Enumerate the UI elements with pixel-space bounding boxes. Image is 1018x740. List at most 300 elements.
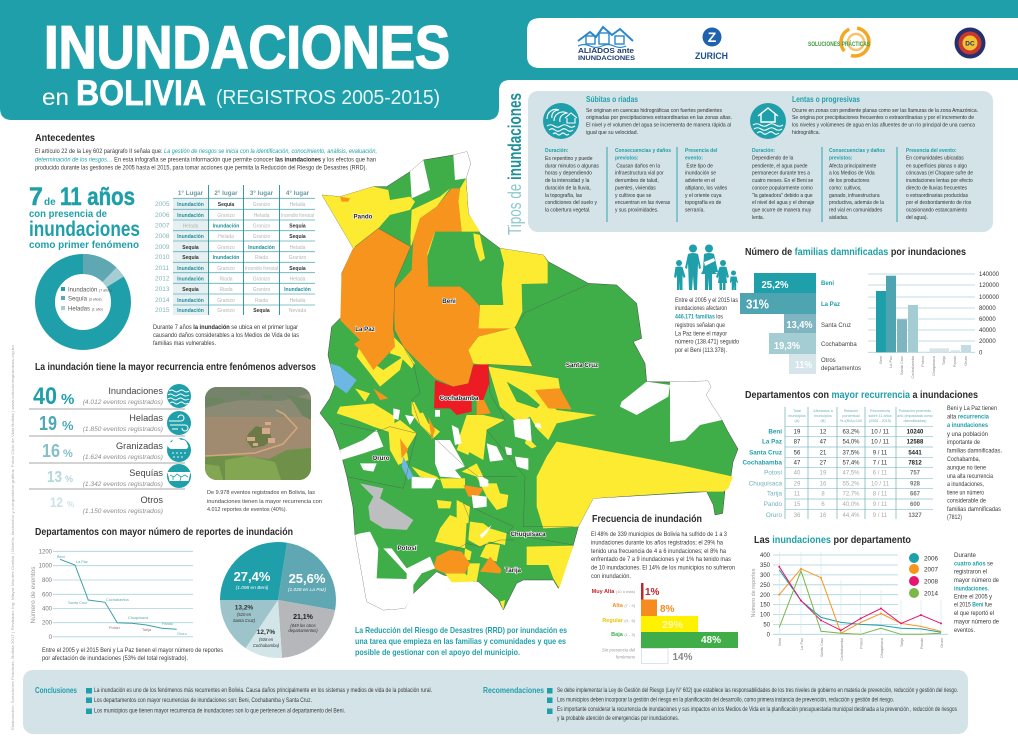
table: ranking por año: Sequía: [218, 202, 234, 208]
text: recurrencia: Beni y La Paz tienen: [947, 406, 997, 412]
line chart: reportes por departamento: 1200: [39, 549, 53, 555]
line chart: inundaciones por departamento: Tarija: [900, 637, 904, 647]
line chart: inundaciones por departamento: Número de reportes: [751, 568, 757, 617]
text: frecuencia: El 48% de 339 municipios de Bolivia ha sufrido de 1 a 3: [591, 532, 728, 538]
table: recurrencia por departamento: año (impactada como: [897, 414, 933, 418]
title: BOLIVIA: [76, 74, 206, 113]
line chart: reportes por departamento: 800: [42, 578, 53, 584]
bar chart: familias por departamento: 40000: [979, 328, 996, 334]
bar chart: frecuencia: 8%: [660, 604, 675, 615]
title: [42, 14, 450, 113]
line chart: inundaciones por departamento: 350: [760, 563, 771, 569]
line chart: reportes por departamento: [30, 549, 193, 641]
text: lentas consecuencias: a los Medios de Vida: [829, 170, 875, 177]
panel: antecedentes: determinación de los riesgos… En esta infografía se presenta información que permite conocer las inundaciones y los efectos que han: [35, 158, 376, 164]
recomendaciones: y la probable atención de emergencias por inundaciones.: [557, 716, 679, 722]
text: súbitas duración: la topografía, las: [545, 193, 582, 199]
table: recurrencia por departamento: 16: [820, 482, 827, 488]
chart legend: 2008: [924, 578, 939, 586]
text: súbitas duración: [545, 148, 599, 214]
list: fenómenos adversos: %: [65, 474, 73, 484]
chart legend: 2014: [924, 590, 939, 598]
text: lentas presencia: por el desbordamiento de ríos: [906, 200, 972, 206]
text: súbitas presencia: altiplano, los valles: [685, 185, 728, 192]
text: reportes: [42, 648, 223, 662]
table: ranking por año: Inundación: [177, 213, 204, 219]
list: fenómenos adversos: Granizadas: [116, 441, 163, 451]
table: ranking por año: Granizo: [217, 298, 235, 304]
text: lentas presencia: directo de lluvias frecuentes: [906, 185, 967, 192]
list: fenómenos adversos: %: [62, 418, 74, 433]
callout: RRD: La Reducción del Riesgo de Desastres (RRD) por inundación es: [355, 625, 567, 635]
map: orange municipalities: [340, 188, 572, 573]
text: lentas consecuencias: [829, 148, 885, 221]
text: lentas consecuencias: de los productores: [829, 178, 870, 184]
heading: 7 de 11 años: de: [44, 197, 56, 208]
list: fenómenos adversos: 40: [33, 383, 57, 410]
list: fenómenos adversos: (1.342 eventos registrados): [83, 481, 163, 488]
table: ranking por año: Inundación: [177, 298, 204, 304]
table: recurrencia por departamento: 72,7%: [842, 492, 860, 498]
table: recurrencia por departamento: municipios: [788, 414, 806, 418]
panel: tipos de inundaciones: [528, 91, 993, 232]
table: recurrencia por departamento: 757: [910, 471, 921, 477]
line chart: reportes por departamento: Cochabamba: [106, 598, 129, 602]
text: súbitas presencia: Presencia del: [685, 148, 718, 154]
table: recurrencia por departamento: 12: [820, 430, 827, 436]
table: recurrencia por departamento: 21: [820, 450, 827, 456]
table: ranking por año: 2° lugar: [214, 189, 238, 197]
table: recurrencia por departamento: (B): [821, 419, 825, 423]
text: frecuencia: inundaciones durante los años registrados; el 29% ha: [591, 540, 724, 546]
bar chart: familias por departamento: Oruro: [964, 356, 968, 366]
table: recurrencia por departamento: Santa Cruz: [749, 449, 782, 456]
text: frecuencia: [591, 513, 735, 580]
bar chart: familias por departamento: 60000: [979, 317, 996, 323]
text: recurrencia: importante de: [947, 440, 981, 446]
text: frecuencia: con inundación.: [591, 574, 631, 580]
table: recurrencia por departamento: Oruro: [766, 512, 782, 519]
pie chart: Cochabamba): [253, 643, 280, 648]
table: ranking por año: Sequía: [253, 308, 270, 314]
icon: hail cloud: [167, 438, 191, 462]
logo: Aliados ante Inundaciones: INUNDACIONES: [578, 55, 636, 62]
list: fenómenos adversos: 12: [50, 494, 63, 510]
bar chart: familias por departamento: 0: [979, 350, 983, 356]
donut chart: Heladas (1 año): [68, 306, 103, 312]
funnel chart: porcentaje de familias: Cochabamba: [821, 342, 857, 348]
table: ranking por año: Granizo: [217, 308, 235, 314]
list: fenómenos adversos: Heladas: [129, 413, 163, 423]
bar chart: familias por departamento: Potosí: [921, 355, 925, 367]
text: recurrencia: [947, 406, 1002, 521]
heading: mayor recurrencia: La inundación tiene la mayor recurrencia entre fenómenos adversos: [35, 361, 316, 373]
list: fenómenos adversos: 19: [39, 413, 57, 435]
table: ranking por año: Inundación: [177, 276, 204, 282]
table: recurrencia por departamento: 37,5%: [842, 450, 860, 456]
text: recurrencia: Cochabamba,: [947, 457, 980, 463]
bar chart: frecuencia: fenómeno: [616, 654, 636, 660]
line chart: inundaciones por departamento: [751, 552, 948, 661]
bar chart: frecuencia: 14%: [672, 652, 693, 663]
bar chart: frecuencia: Muy Alta (10 ó más): [592, 589, 636, 595]
logo: Zurich: [695, 28, 728, 62]
table: recurrencia por departamento: sobre 11 años: [868, 414, 892, 418]
map: labels: Santa Cruz: [566, 362, 598, 369]
heading: 7 de 11 años: inundaciones: [29, 218, 140, 241]
bar chart: frecuencia: Alta (7 - 9): [612, 603, 636, 609]
chart legend: 2007: [924, 566, 939, 574]
logo: Soluciones Prácticas: SOLUCIONES PRÁCTICAS: [808, 39, 871, 48]
bar chart: frecuencia: 48%: [701, 635, 721, 646]
bar chart: familias por departamento: 140000: [979, 272, 1000, 278]
text: lentas consecuencias: ganado, infraestructura: [829, 193, 880, 199]
text: súbitas presencia: advierte en el: [685, 178, 715, 184]
heading: mayor recurrencia a inundaciones: Departamentos con mayor recurrencia a inundaciones: [745, 389, 978, 401]
map silhouette: [320, 152, 738, 610]
heading: familias damnificadas: Número de familias damnificadas por inundaciones: [745, 246, 966, 258]
pie chart: 25,6%: [289, 571, 326, 586]
panel: antecedentes: Antecedentes: [35, 132, 95, 144]
line chart: reportes por departamento: 200: [42, 621, 53, 627]
callout: RRD: una tarea que empieza en las familias y comunidades y que es: [355, 636, 566, 646]
donut chart: Inundación (7 años): [68, 288, 112, 294]
donut chart: [45, 264, 121, 340]
table: recurrencia por departamento: 19: [820, 471, 827, 477]
panel: antecedentes: producido durante las gestiones de 2005 hasta el 2015, para tomar acciones que permita la Reducción del Riesgo de Desastres (RRD).: [35, 166, 367, 172]
table: ranking por año: Inundación: [177, 308, 204, 314]
map: gray salt flat: [360, 483, 413, 530]
bar chart: familias por departamento: Cochabamba: [911, 355, 915, 379]
text: por departamento: mayor número de: [954, 620, 1000, 626]
text: frecuencia: enfrentado de 7 a 9 inundaciones y el 1% ha tenido mas: [591, 557, 731, 563]
table: recurrencia por departamento: 63,2%: [842, 430, 860, 436]
text: lentas consecuencias: aisladas.: [829, 215, 848, 221]
pie chart: 27,4%: [234, 569, 271, 584]
table: ranking por año: Helada: [183, 224, 199, 230]
pie chart: (520 en: [237, 612, 252, 617]
text: recurrencia: a inundaciones,: [947, 482, 984, 488]
text: súbitas: El nivel y el volumen del agua se incrementa de manera rápida al: [586, 122, 731, 128]
pie chart: (508 en: [259, 637, 274, 642]
line chart: inundaciones por departamento: 50: [763, 622, 771, 628]
table: recurrencia por departamento: (2005 - 2015): [869, 419, 891, 423]
text: recurrencia: familias damnificadas: [947, 507, 1001, 513]
logo: Soluciones Prácticas: [808, 28, 871, 56]
chart legend: 2006: [924, 556, 939, 562]
text: lentas duración: lenta.: [752, 215, 764, 221]
line chart: inundaciones por departamento: Pando: [920, 638, 924, 649]
table: recurrencia por departamento: 54,0%: [842, 440, 860, 446]
funnel chart: porcentaje de familias: Otros: [821, 358, 836, 364]
text: lentas: hidrográfica.: [792, 130, 820, 136]
table: ranking por año: Riada: [219, 276, 233, 282]
icon: lentas: [750, 103, 786, 139]
pie chart: (1.028 en La Paz): [288, 587, 326, 593]
callout: RRD: [355, 625, 567, 657]
table: ranking por año: Helada: [290, 276, 306, 282]
funnel chart: porcentaje de familias: 11%: [795, 360, 812, 371]
list: fenómenos adversos: %: [63, 448, 73, 460]
text: recurrencia: (7812): [947, 515, 962, 521]
text: lentas: Lentas o progresivas: [792, 95, 861, 104]
map: labels: Chuquisaca: [510, 531, 546, 538]
text: lentas presencia: o extraordinarias producidas: [906, 193, 968, 199]
table: recurrencia por departamento: municipios: [814, 414, 832, 418]
bar chart: familias por departamento: 100000: [979, 295, 1000, 301]
table: ranking por año: Helada: [290, 245, 306, 251]
table: ranking por año: Helada: [218, 234, 234, 240]
table: ranking por año: Riada: [255, 255, 268, 261]
text: súbitas duración: condiciones del suelo y: [545, 200, 597, 206]
text: durante 7 años: Durante 7 años la inundación se ubica en el primer lugar: [153, 325, 298, 331]
table: recurrencia por departamento: Población promedio: [899, 409, 931, 413]
line chart: inundaciones por departamento: La Paz: [800, 638, 804, 650]
text: súbitas presencia: Este tipo de: [686, 163, 713, 170]
text: súbitas consecuencias: derrumbes de talud,: [615, 178, 659, 184]
icon: family: [674, 244, 738, 290]
table: recurrencia por departamento: 10240: [907, 430, 924, 436]
text: súbitas consecuencias: infraestructura vial por: [615, 170, 664, 177]
table: ranking por año: Inundación: [177, 234, 204, 240]
table: recurrencia por departamento: 57,4%: [842, 461, 860, 467]
table: ranking por año: Inundación: [213, 224, 239, 230]
text: súbitas: originadas por precipitaciones extraordinarias en las zonas altas.: [586, 115, 732, 121]
table: recurrencia por departamento: Recurrencia: [870, 409, 891, 413]
table: recurrencia por departamento: [742, 407, 933, 519]
table: recurrencia por departamento: 1327: [908, 513, 922, 519]
line chart: reportes por departamento: Oruro: [177, 632, 187, 636]
conclusiones: La inundación es uno de los fenómenos más recurrentes en Bolivia. Causa daños principalmente en los sistemas y medios de vida de la población rural.: [94, 688, 432, 694]
text: reportes: por afectación de inundaciones (53% del total registrado).: [42, 656, 188, 662]
recomendaciones: [483, 686, 958, 722]
bar chart: frecuencia: 1%: [645, 587, 660, 598]
table: recurrencia por departamento: Tarija: [767, 491, 782, 498]
text: súbitas presencia: evento:: [685, 155, 703, 162]
text: por departamento: cuatro años se: [954, 562, 994, 568]
text: lentas presencia: Presencia del evento:: [906, 148, 957, 154]
conclusiones: [35, 686, 432, 714]
map: labels: Beni: [442, 298, 456, 305]
table: ranking por año: Granizo: [253, 202, 270, 208]
list: fenómenos adversos: Sequías: [129, 468, 163, 478]
text: súbitas presencia: [685, 148, 728, 214]
table: ranking por año: Incendio forestal: [281, 213, 314, 219]
title: (REGISTROS 2005-2015): [216, 87, 440, 109]
funnel chart: porcentaje de familias: 31%: [746, 296, 769, 312]
table: recurrencia por departamento: 11: [794, 492, 801, 498]
recomendaciones: Los municipios deben incorporar la gestión del riesgo en la planificación del desarrollo, como primera instancia de prevención, reducción y gestión del riesgo.: [557, 698, 894, 704]
text: recurrencia: alta recurrencia: [947, 414, 990, 420]
table: recurrencia por departamento: La Paz: [762, 439, 782, 446]
text: lentas duración: cuatro meses. En el Beni se: [752, 178, 813, 184]
pie chart: (849 los otros: [290, 623, 317, 628]
map: yellow municipalities: [322, 178, 733, 610]
table: ranking por año: Nevada: [289, 308, 306, 314]
line chart: inundaciones por departamento: Santa Cruz: [820, 638, 824, 657]
icon: súbitas: [543, 103, 579, 139]
text: súbitas duración: horas y dependiendo: [545, 170, 592, 177]
panel: antecedentes: El artículo 22 de la Ley 602 parágrafo II señala que: La gestión de riesgos se inicia con la identificación, conocimiento, análisis, evaluación,: [35, 149, 377, 155]
panel: conclusiones y recomendaciones: [23, 670, 968, 734]
text: lentas presencia: del agua).: [906, 215, 928, 221]
line chart: inundaciones por departamento: 300: [760, 573, 771, 579]
text: lentas consecuencias: Consecuencias y daños: [829, 148, 885, 154]
table: ranking por año: Granizo: [253, 287, 270, 293]
list: fenómenos adversos: Inundaciones: [108, 386, 163, 396]
table: ranking por año: Sequía: [182, 245, 199, 251]
table: ranking por año: 2007: [155, 222, 170, 230]
table: ranking por año: Granizo: [253, 224, 270, 230]
map: lakes: [330, 363, 413, 480]
title: INUNDACIONES: [44, 14, 450, 81]
pie chart: departamentos): [288, 628, 318, 633]
table: ranking por año: 2015: [155, 307, 170, 314]
text: durante 7 años: [153, 325, 299, 347]
map: no-presence areas: [340, 152, 722, 610]
text: lentas consecuencias: Afecta principalmente: [829, 163, 876, 170]
conclusiones: Los departamentos con mayor recurrencias de inundaciones son: Beni, Cochabamba y Santa Cruz.: [94, 698, 312, 704]
line chart: reportes por departamento: 400: [42, 606, 53, 612]
text: súbitas duración: la cobertura vegetal.: [545, 207, 591, 214]
text: súbitas: [586, 95, 732, 136]
text: por departamento: eventos.: [954, 628, 975, 634]
table: ranking por año: Granizo: [217, 213, 235, 219]
bar chart: familias por departamento: 80000: [979, 306, 996, 312]
text: por departamento: Durante: [954, 553, 977, 559]
list: fenómenos adversos: %: [61, 391, 74, 408]
text: familias: por el Beni (113.378).: [675, 348, 727, 354]
table: ranking por año: Sequía: [182, 255, 199, 261]
table: ranking por año: Riada: [255, 298, 268, 304]
funnel chart: porcentaje de familias: Beni: [821, 281, 834, 287]
funnel chart: porcentaje de familias: departamentos: [821, 366, 861, 372]
table: recurrencia por departamento: 9 / 11: [873, 513, 888, 519]
text: photo caption: [207, 490, 322, 513]
text: recurrencia: y una población: [947, 432, 988, 438]
heading: 7 de 11 años: 7: [29, 183, 43, 211]
text: lentas presencia: cóncavas (el Chapare sufre de: [906, 170, 973, 177]
table: ranking por año: 2013: [155, 286, 170, 293]
table: recurrencia por departamento: 19: [794, 430, 801, 436]
text: reportes: Entre el 2005 y el 2015 Beni y La Paz tienen el mayor número de reportes: [42, 648, 223, 654]
table: recurrencia por departamento: 600: [910, 502, 921, 508]
line chart: reportes por departamento: Tarija: [142, 628, 152, 632]
map: department borders: [340, 228, 670, 550]
table: ranking por año: 2009: [155, 244, 170, 251]
funnel chart: porcentaje de familias: 25,2%: [762, 280, 789, 291]
map: labels: Cochabamba: [440, 395, 479, 402]
text: por departamento: mayor número de: [954, 578, 1000, 584]
logo: Aliados ante Inundaciones: [578, 27, 636, 62]
text: photo caption: inundaciones tienen la mayor recurrencia con: [207, 499, 322, 505]
table: ranking por año: 4° lugar: [286, 189, 310, 197]
callout: RRD: posible de gestionar con el apoyo del municipio.: [355, 647, 520, 657]
text: súbitas: Súbitas o riadas: [586, 95, 639, 104]
text: lentas consecuencias: productiva, además de la: [829, 200, 884, 206]
table: recurrencia por departamento: Potosí: [764, 470, 782, 477]
bar chart: familias por departamento: Beni: [879, 356, 883, 364]
text: súbitas consecuencias: encuentran en las riveras: [615, 200, 671, 206]
table: ranking por año: Inundación: [248, 245, 275, 251]
text: súbitas: Se originan en cuencas hidrográficas con fuertes pendientes: [586, 108, 722, 114]
text: recurrencia: aunque no tiene: [947, 466, 987, 472]
text: durante 7 años: familias mas vulnerables.: [153, 341, 216, 347]
table: recurrencia por departamento: Afectados a: [813, 409, 834, 413]
table: recurrencia por departamento: 36: [794, 513, 801, 519]
text: súbitas presencia: serranía.: [685, 207, 705, 214]
table: recurrencia por departamento: 10 / 11: [871, 440, 890, 446]
text: por departamento: el 2015 Beni fue: [954, 602, 993, 608]
line chart: inundaciones por departamento: Cochabamba: [840, 637, 844, 661]
bar chart: frecuencia: [592, 583, 738, 664]
table: ranking por año: Sequía: [289, 234, 306, 240]
table: ranking por año: 3° lugar: [250, 189, 274, 197]
text: lentas duración: pendiente, el agua puede: [752, 163, 808, 170]
logo: Zurich: Z: [708, 29, 717, 45]
table: recurrencia por departamento: Beni: [768, 429, 782, 436]
text: súbitas duración: de la intensidad y la: [545, 178, 589, 184]
bar chart: frecuencia: Baja (1 - 3): [611, 632, 636, 638]
table: recurrencia por departamento: Cochabamba: [742, 460, 782, 467]
map: red municipalities: [434, 364, 489, 415]
table: ranking por año: Inundación: [177, 202, 204, 208]
line chart: reportes por departamento: 600: [42, 592, 53, 598]
line chart: inundaciones por departamento: 0: [767, 632, 771, 638]
text: lentas duración: Duración:: [752, 148, 775, 154]
list: fenómenos adversos: [29, 383, 185, 515]
vertical heading: tipos de inundaciones: Tipos de inundaciones: [505, 93, 525, 235]
icon: cracked soil: [167, 464, 191, 488]
table: recurrencia por departamento: 55,2%: [842, 482, 860, 488]
text: lentas: [792, 95, 978, 136]
text: por departamento: [954, 553, 1000, 634]
table: ranking por año: 1° Lugar: [178, 189, 204, 197]
table: recurrencia por departamento: 40,0%: [842, 502, 860, 508]
text: familias: inundaciones afectaron: [675, 306, 727, 312]
bar chart: familias por departamento: Chuquisaca: [932, 355, 936, 376]
table: recurrencia por departamento: Relación: [844, 409, 858, 413]
line chart: reportes por departamento: Número de eventos: [30, 566, 37, 623]
text: súbitas duración: Es repentino y puede: [545, 156, 593, 162]
funnel chart: porcentaje de familias: [740, 273, 861, 374]
line chart: inundaciones por departamento: Beni: [778, 638, 782, 646]
text: familias: 446.171 familias los: [675, 314, 723, 320]
header band: [0, 0, 1018, 120]
text: súbitas consecuencias: Consecuencias y daños: [615, 148, 671, 154]
table: recurrencia por departamento: 8 / 11: [873, 492, 888, 498]
text: photo caption: De 9.978 eventos registrados en Bolivia, las: [207, 490, 315, 496]
table: ranking por año: Helada: [254, 213, 270, 219]
table: recurrencia por departamento: 6: [821, 502, 825, 508]
conclusiones: Los municipios que tienen mayor recurrencia de inundaciones son lo que pertenecen al departamento del Beni.: [94, 708, 345, 714]
line chart: inundaciones por departamento: 100: [760, 612, 771, 618]
table: ranking por año: Incendio forestal: [245, 266, 278, 272]
table: recurrencia por departamento: 7812: [908, 461, 922, 467]
bar chart: familias por departamento: Santa Cruz: [900, 356, 904, 375]
text: frecuencia: de 10 inundaciones. El 14% de los municipios no sufrieron: [591, 566, 735, 572]
text: lentas duración: Dependiendo de la: [752, 155, 793, 162]
bar chart: familias por departamento: 20000: [979, 339, 996, 345]
map: labels: Potosí: [398, 545, 417, 552]
line chart: reportes por departamento: La Paz: [76, 560, 88, 564]
list: fenómenos adversos: (1.624 eventos registrados): [83, 454, 163, 461]
bar chart: familias por departamento: La Paz: [889, 356, 893, 368]
text: lentas: los niveles y volúmenes de agua en las afluentes de un río principal de una cuenca: [792, 122, 976, 128]
text: por departamento: el que reportó el: [954, 611, 994, 617]
line chart: reportes por departamento: 0: [49, 635, 53, 641]
text: photo caption: 4.012 reportes de eventos (40%).: [207, 507, 287, 513]
